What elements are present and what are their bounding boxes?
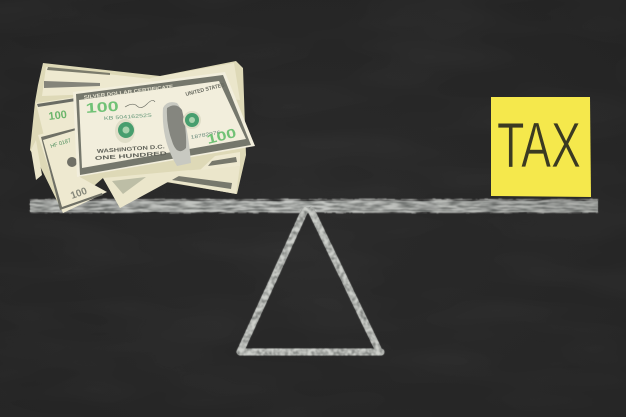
right header text: UNITED STATES [185, 82, 226, 98]
right seal [183, 111, 201, 129]
lower centre bill [103, 170, 190, 208]
lower right bill [164, 152, 240, 194]
yellow sticky note with TAX [491, 97, 591, 197]
engraved frame [76, 75, 251, 175]
chalk beam [30, 199, 598, 213]
serial number: KB 50416252S [104, 113, 153, 122]
denomination: 100 [69, 186, 89, 202]
left denomination: 100 [48, 109, 68, 123]
lower left bill [38, 125, 107, 213]
bottom block text: WASHINGTON D.C. [97, 144, 166, 155]
front bill [73, 72, 255, 177]
stack of dollar bills [30, 61, 255, 213]
green denomination left: 100 [85, 98, 119, 116]
portrait [163, 102, 191, 166]
chalk triangle fulcrum [240, 210, 381, 352]
left seal [115, 119, 135, 143]
green denomination right: 100 [205, 125, 238, 147]
serial right: 18782976 [190, 130, 221, 141]
back bills [30, 61, 246, 213]
front bill: ONE HUNDRED [95, 151, 167, 162]
signature [125, 100, 155, 108]
serial number: HF 0187 [50, 138, 72, 150]
top banner text: SILVER DOLLAR CERTIFICATE [84, 84, 174, 101]
TAX label: TAX [497, 109, 581, 181]
